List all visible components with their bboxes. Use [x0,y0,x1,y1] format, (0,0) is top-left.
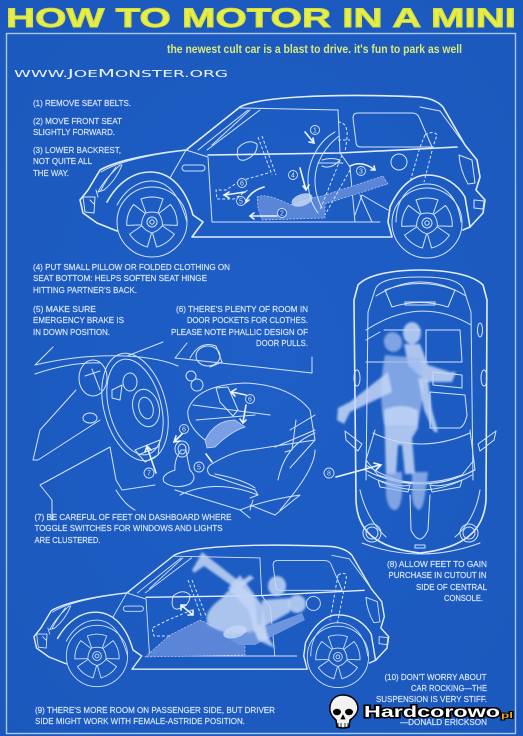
note 6: DOOR PULLS. [256,338,308,348]
note 7 [34,512,232,545]
note 6: PLEASE NOTE PHALLIC DESIGN OF [171,327,308,337]
note 5: (5) MAKE SURE [33,304,96,314]
dashboard interior drawing [33,342,315,520]
watermark logo [330,695,513,728]
hardcorowo wordmark: Hardcorowo [364,704,500,721]
note 7: TOGGLE SWITCHES FOR WINDOWS AND LIGHTS [34,523,223,533]
step number markers [310,126,320,134]
note 8: SIDE OF CENTRAL [416,582,487,592]
note 7: ARE CLUSTERED. [34,535,100,545]
arrows [305,132,314,143]
text notes [33,98,487,727]
note 3: THE WAY. [33,168,69,178]
note 10: —DONALD ERICKSON [400,717,487,727]
note 5: IN DOWN POSITION. [33,327,110,337]
dashboard interior drawing: 6 [248,396,252,404]
car side view 2 [34,545,389,688]
note 2 [33,116,123,137]
icon: skull [330,695,358,728]
seat and interior details: 4 [291,172,295,180]
note 4: SEAT BOTTOM: HELPS SOFTEN SEAT HINGE [33,273,207,283]
top view car [324,270,496,554]
note 5 [33,304,124,337]
note 7: (7) BE CAREFUL OF FEET ON DASHBOARD WHERE [34,512,232,522]
note 5: EMERGENCY BRAKE IS [33,315,124,325]
seat and interior details: 3 [359,168,363,176]
car side view 1 [80,95,485,258]
note 6: DOOR POCKETS FOR CLOTHES. [187,315,308,325]
note 3 [33,145,121,178]
note 6 [171,304,308,348]
note 8: PURCHASE IN CUTOUT IN [388,570,486,580]
dashboard interior drawing: 7 [147,470,151,478]
seat and interior details: 5 [239,198,243,206]
note 9 [35,705,275,726]
note 1: (1) REMOVE SEAT BELTS. [33,98,131,108]
seat and interior details [216,122,437,222]
note 4: (4) PUT SMALL PILLOW OR FOLDED CLOTHING ON [33,262,230,272]
note 10 [376,672,487,727]
note 3: NOT QUITE ALL [33,156,92,166]
note 4: HITTING PARTNER'S BACK. [33,285,137,295]
website url: WWW. J OE M ONSTER.ORG [14,67,228,80]
pl suffix: pl [501,710,513,720]
dashboard number markers [246,394,254,404]
subtitle: the newest cult car is a blast to drive. it's fun to park as well [167,42,462,56]
note 4 [33,262,230,295]
dashboard interior drawing: 5 [197,464,201,472]
dashboard interior drawing: 6 [182,426,186,434]
note 6: (6) THERE'S PLENTY OF ROOM IN [176,304,308,314]
note 10: SUSPENSION IS VERY STIFF. [376,694,487,704]
crash-test dummies [337,322,456,510]
note 8: (8) ALLOW FEET TO GAIN [387,559,487,569]
note 9: SIDE MIGHT WORK WITH FEMALE-ASTRIDE POSITION. [35,716,245,726]
figures and seat [145,552,346,657]
seat and interior details: 6 [240,180,244,188]
note 3: (3) LOWER BACKREST, [33,145,121,155]
note 10: (10) DON'T WORRY ABOUT [384,672,487,682]
note 10: CAR ROCKING—THE [411,683,487,693]
note 8 [387,559,487,603]
note 9: (9) THERE'S MORE ROOM ON PASSENGER SIDE, BUT DRIVER [35,705,275,715]
note 2: SLIGHTLY FORWARD. [33,127,115,137]
dashboard arrows [231,389,246,396]
arrow and marker 8 [336,463,381,477]
seat and interior details: 2 [280,210,284,218]
title: HOW TO MOTOR IN A MINI [6,3,516,33]
note 8: CONSOLE. [444,593,483,603]
seat and interior details: 1 [313,128,317,134]
note 2: (2) MOVE FRONT SEAT [33,116,123,126]
top view car: 8 [327,470,331,478]
